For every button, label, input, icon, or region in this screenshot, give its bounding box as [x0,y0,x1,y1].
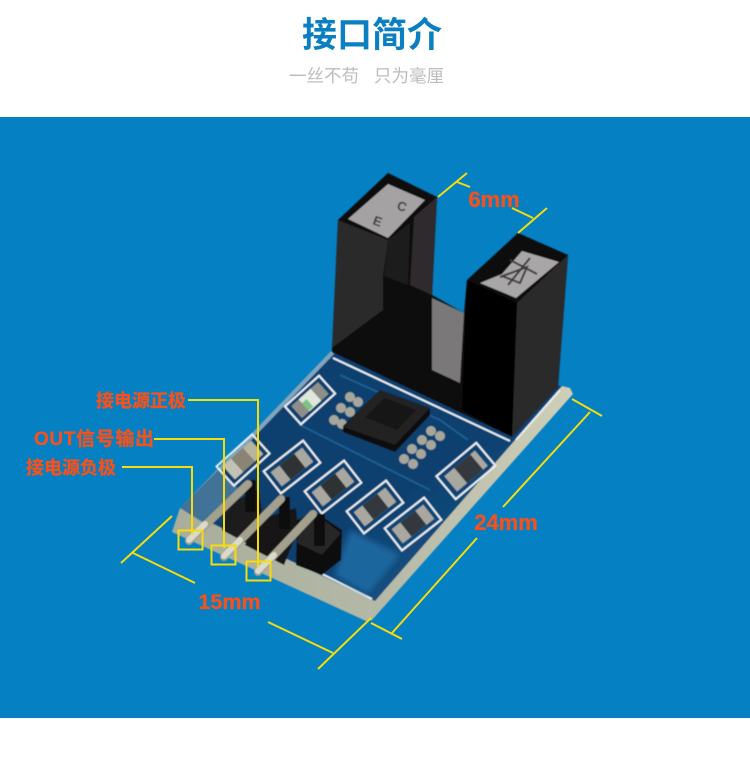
resistor P3 [385,498,441,550]
capacitor [216,434,270,486]
subtitle: 只为毫厘 [374,66,444,86]
callout: negative pin [26,458,202,550]
callout: OUT pin: OUT信号输出 [34,427,154,450]
slot sensor: C [395,198,410,215]
subtitle [289,66,444,86]
pin header [222,480,342,575]
dimension: 15mm [121,516,371,669]
metal pins [189,484,313,572]
dimension: 24mm: 24mm [474,510,538,535]
callout: positive pin [96,391,270,580]
circuit board [172,351,573,621]
resistor P1 [347,481,403,533]
chip body [343,390,430,452]
resistor R2 [305,461,361,513]
callout: OUT pin [34,427,236,564]
slot sensor [332,173,568,437]
callout: positive pin: 接电源正极 [96,391,186,411]
callout: negative pin: 接电源负极 [26,458,116,478]
dimension: 6mm: 6mm [468,187,520,212]
subtitle: 一丝不苟 [289,66,359,86]
chip pins [329,392,445,469]
blue background panel [0,117,750,718]
LED [285,376,335,424]
slot sensor: E [371,213,385,230]
resistor R1 [264,441,320,493]
dimension: 24mm [371,399,602,639]
title: 接口简介 [302,16,442,55]
dimension: 15mm: 15mm [198,590,261,614]
dimension: 6mm [438,173,547,233]
resistor R3 [436,443,496,499]
module photo illustration [172,173,573,621]
